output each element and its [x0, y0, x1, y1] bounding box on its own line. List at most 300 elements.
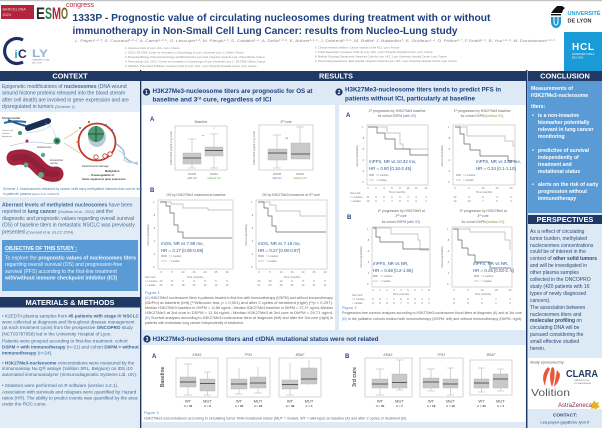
survival curve: PFS DSPM 3rd cure: 6	[400, 297, 402, 301]
survival curve: PFS D0PM 3rd cure: .8	[447, 238, 450, 242]
survival curve: PFS DSPM baseline: < median	[350, 199, 361, 203]
survival curve: PFS D0PM 3rd cure: 1	[447, 227, 449, 231]
survival curve: OS 3rd cure: 15	[291, 270, 294, 274]
survival curve: PFS DSPM 3rd cure: .8	[367, 238, 370, 242]
survival curve: PFS DSPM baseline: .4	[362, 158, 365, 162]
panel: results background	[141, 81, 526, 428]
survival curve: OS baseline: 1	[153, 200, 155, 204]
survival curve: PFS DSPM 3rd cure: 3	[393, 288, 395, 292]
survival curve: PFS DSPM baseline: 12	[415, 186, 418, 190]
text: context intro: Epigenetic modifications of nucleosomes (DNA wound	[2, 84, 127, 90]
affiliations right	[315, 46, 457, 63]
survival curve: OS 3rd cure: OS by H3K27Me3 measured at 3	[262, 193, 311, 197]
survival curve: PFS DSPM 3rd cure: 4	[421, 297, 423, 301]
survival curve: OS baseline: 9	[182, 279, 184, 283]
survival curve: PFS DSPM 3rd cure: mPFS, NR vs NR,	[373, 261, 408, 266]
survival curve: PFS D0PM baseline: 10	[482, 186, 485, 190]
boxplot: KRAS baseline: n = 9	[204, 404, 211, 408]
scheme: nucleosome release figure: Epigenetic	[2, 135, 13, 138]
panel: context	[0, 71, 149, 291]
survival curve: OS baseline: 25	[215, 270, 218, 274]
survival curve: PFS D0PM baseline: 7	[482, 199, 484, 203]
survival curve: PFS DSPM baseline: 9	[375, 199, 377, 203]
affiliations left: 5. Statistics, Pole Santé Publique, Hospices Civils of Lyon, HCL, Lyon University Hospital Center, Lyon, France	[125, 64, 257, 68]
text: perspectives: small effective studied	[530, 339, 579, 345]
boxplot: KRAS baseline	[176, 353, 218, 408]
text: conclusion: titers:	[531, 104, 545, 110]
logo: ESMO congress: congress	[66, 0, 94, 9]
caption: figure 1: H3K27Me3 at 3rd cure in DSPM = 11,54 ng/mL; Median H3K27Me3 at 3rd cure in DbPM = 29,71 ng/mL	[145, 311, 333, 315]
text: conclusion: monitoring	[538, 134, 565, 140]
survival curve: PFS D0PM baseline: < median	[463, 178, 474, 182]
survival curve: OS baseline: OS by H3K27Me3 measured at baseline	[166, 193, 226, 197]
text: context intro: after cell death) are involved in gene expression and are	[2, 97, 129, 103]
logo: Université de Lyon: UNIVERSITÉ	[568, 9, 601, 17]
survival curve: PFS DSPM baseline: >= median	[350, 195, 363, 199]
survival curve: PFS D0PM 3rd cure: 9	[453, 297, 455, 301]
survival curve: PFS D0PM baseline: .2	[448, 169, 451, 173]
survival curve: PFS D0PM baseline: 12	[454, 199, 457, 203]
boxplot: TP53 baseline: n = 20	[235, 404, 244, 408]
text: conclusion	[528, 81, 602, 213]
survival curve: OS 3rd cure: .6	[251, 226, 254, 230]
caption: figure 1: patients with metastatic lung cancer independently of treatment.	[145, 321, 244, 325]
text: context intro: dysregulated in tumors (Scheme 1).	[2, 104, 76, 110]
survival curve: PFS D0PM baseline: 1	[454, 109, 455, 113]
panel: sponsors: Study sponsored by:	[530, 360, 565, 364]
label A: A	[152, 354, 157, 360]
boxplot: BRAF 3rd cure	[470, 353, 512, 408]
survival curve: OS baseline: 30	[226, 270, 229, 274]
boxplot: baseline: DSPM	[188, 172, 197, 176]
survival curve: OS baseline: 22	[160, 279, 163, 283]
boxplot: BRAF baseline: WT	[287, 398, 294, 404]
text: perspectives: types of newly diagnosed	[530, 291, 586, 297]
boxplot: BRAF 3rd cure: WT	[478, 398, 485, 404]
survival curve: OS baseline: mOS, NR vs 7.98 mo,	[161, 241, 204, 246]
survival curve: PFS DSPM baseline: 4	[383, 186, 385, 190]
survival curve: PFS D0PM baseline: 20	[510, 186, 513, 190]
caption: figure 2: Progression-free survival analyses according to H3K27Me3-nucleosome blood titers at diagnosis (A) and at 3rd cure	[342, 311, 522, 315]
heading: result 2: 2	[338, 90, 341, 96]
text: conclusion: independently of	[538, 155, 579, 161]
survival curve: OS 3rd cure: 0	[258, 270, 260, 274]
survival curve: PFS DSPM baseline: for cohort DSPM (with ICI)	[378, 114, 416, 118]
survival curve: PFS DSPM 3rd cure: 4	[428, 301, 430, 305]
survival curve: PFS DSPM 3rd cure: 7	[386, 297, 388, 301]
boxplot: baseline: H3K27Me3 (ng/mL) log scale	[169, 131, 173, 165]
logo: Volition: Volition	[531, 388, 570, 399]
text: conclusion: •	[532, 182, 534, 188]
text: conclusion: relevant in lung cancer	[538, 127, 594, 133]
text: methods: (NCT03787058) led in the University Hospital of Lyon.	[2, 332, 112, 336]
survival curve: OS baseline: 5	[215, 279, 217, 283]
boxplot: baseline: **	[202, 134, 205, 138]
boxplot: TP53 3rd cure: TP53	[437, 353, 445, 357]
scheme: nucleosome release figure: tumor-suppressor gene expression	[82, 177, 126, 181]
survival curve: PFS D0PM baseline: .8	[448, 136, 451, 140]
scheme: nucleosome release figure: Nucleosome	[37, 145, 52, 149]
text: conclusion: progression without	[538, 189, 587, 195]
caption: figure 1: (A) H3K27Me3 nucleosome titers in patients treated in first-line with immunotherapy (DSPM) and without immunotherapy	[145, 296, 333, 300]
scheme: nucleosome release figure: Chromosome	[2, 116, 20, 120]
survival curve: OS 3rd cure: 9	[291, 279, 293, 283]
survival curve: OS baseline: 12	[215, 283, 218, 287]
heading: results: RESULTS	[319, 72, 353, 81]
survival curve: OS 3rd cure: 19	[269, 279, 272, 283]
text: aberrant levels: (OS) of baseline titers in metastatic NSCLC was previously	[2, 223, 135, 229]
logo: Université de Lyon	[551, 6, 601, 28]
heading: context: CONTEXT	[52, 72, 88, 81]
survival curve: PFS DSPM baseline: 4	[415, 195, 417, 199]
survival curve: PFS D0PM baseline: .4	[448, 158, 451, 162]
survival curve: PFS D0PM 3rd cure: for cohort D0PM (without ICI)	[462, 220, 504, 224]
caption: figure 1: Figure 1	[145, 290, 160, 295]
logo: CICLY: C	[18, 47, 27, 61]
survival curve: OS 3rd cure: Survival probability	[244, 223, 248, 246]
survival curve: OS baseline: 14	[204, 283, 207, 287]
boxplot: baseline: without ICI	[207, 176, 221, 180]
survival curve: PFS D0PM 3rd cure: 5	[481, 301, 483, 305]
survival curve: PFS D0PM 3rd cure: >= median	[481, 274, 494, 278]
title	[72, 12, 491, 37]
boxplot: KRAS baseline: n = 34	[184, 404, 193, 408]
scheme: nucleosome release figure: Genetic	[2, 132, 10, 135]
survival curve: PFS D0PM 3rd cure	[440, 209, 514, 305]
panel: conclusion	[528, 71, 602, 213]
survival curve: PFS D0PM baseline: st	[455, 109, 458, 112]
callout: objective of this study: To explore the prognostic values of nucleosomes titers	[5, 256, 136, 262]
survival curve: PFS DSPM baseline: < median	[376, 178, 387, 182]
survival curve: OS baseline: 0	[160, 270, 162, 274]
affiliations right: 9. Pneumology department, East hospital, Hospices Civils de Lyon, HCL, Lyon University Hospital Center, Lyon, France	[315, 59, 457, 63]
boxplot: TP53 3rd cure: n = 16	[427, 404, 436, 408]
logo: Clara: CLARA	[566, 369, 598, 380]
survival curve: PFS DSPM baseline: .2	[362, 169, 365, 173]
boxplot: baseline	[169, 120, 227, 180]
affiliations right: 8. Medical Oncology Department, Hospices Civils de Lyon, HCL, Lyon University Hospital Center, Lyon, France	[315, 54, 447, 58]
survival curve: PFS DSPM 3rd cure: < median	[380, 279, 391, 283]
logo: Clara	[566, 369, 598, 385]
survival curve: OS baseline: Num.sub	[145, 275, 156, 279]
heading: result 3: 3	[146, 337, 149, 343]
survival curve: PFS DSPM 3rd cure: 3	[428, 297, 430, 301]
panel: contact: Lea.payen-gay@chu-lyon.fr	[540, 420, 590, 424]
survival curve: PFS D0PM 3rd cure: 0	[447, 282, 449, 286]
boxplot: TP53 baseline: WT	[236, 398, 243, 404]
survival curve: PFS DSPM baseline	[350, 109, 428, 203]
survival curve: PFS DSPM baseline: >= median	[376, 173, 389, 177]
affiliations left: 3. Molecular Biology, Pharmacotoxicology and Biochemistry Lyon Sud, Hospices Civils de Lyon, Pierre Bénite, France	[125, 55, 265, 59]
survival curve: PFS D0PM 3rd cure: 7	[481, 297, 483, 301]
scheme: nucleosome release figure: Extracellular	[50, 159, 63, 162]
text: methods: (at each treatment cycle) from the prospective ONCOPRO study	[2, 325, 133, 330]
survival curve: OS baseline: 8	[204, 279, 206, 283]
survival curve: OS 3rd cure: 11	[324, 283, 327, 287]
survival curve: PFS DSPM baseline: 7	[383, 199, 385, 203]
boxplot: BRAF baseline	[279, 353, 321, 408]
callout: objective of this study: regarding overall survival (OS) and progression-free	[5, 262, 122, 268]
text: methods: under the ROC curve.	[2, 402, 47, 406]
survival curve: PFS DSPM 3rd cure: >= median	[352, 297, 365, 301]
survival curve: OS baseline: .6	[153, 226, 156, 230]
survival curve: OS baseline: 16	[193, 283, 196, 287]
survival curve: PFS D0PM 3rd cure: .4	[447, 260, 450, 264]
survival curve: PFS DSPM baseline: 4	[407, 195, 409, 199]
heading: result 1: 1	[145, 90, 148, 96]
survival curve: PFS DSPM baseline: 7	[391, 199, 393, 203]
survival curve: PFS DSPM 3rd cure: rd	[397, 214, 400, 217]
affiliations left: 1. Hospices Civils of Lyon, HCL, Lyon, France	[125, 46, 180, 50]
survival curve: OS 3rd cure: HR = 0.27 [0.08-0.87]	[258, 248, 300, 253]
panel: sponsors	[528, 358, 602, 411]
survival curve: PFS D0PM baseline: 2	[510, 195, 512, 199]
logo: Université de Lyon: DE LYON	[568, 18, 592, 24]
survival curve: PFS D0PM 3rd cure: progression by H3K27Me3 at	[463, 209, 507, 213]
survival curve: OS baseline: >= median	[169, 254, 182, 258]
logo: CICLY: DE LYON	[32, 62, 42, 64]
survival curve: PFS DSPM baseline: 1	[362, 125, 364, 129]
survival curve: OS 3rd cure: 25	[313, 270, 316, 274]
heading: result 1: H3K27Me3-nucleosome titers are prognostic for OS at	[152, 88, 313, 95]
survival curve: OS baseline: .4	[153, 239, 156, 243]
caption: figure 1: Median H3K27Me3 baseline in DSPM = 11,86 ng/mL; Median H3K27Me3 baseline in DbPM = 27,37 ng/mL;Median	[145, 306, 333, 310]
text: conclusion: mutational status	[538, 169, 580, 175]
survival curve: PFS DSPM 3rd cure: .4	[367, 260, 370, 264]
title: 1333P - Prognostic value of circulating nucleosomes during treatment with or without	[72, 12, 491, 24]
survival curve: PFS D0PM 3rd cure: 3	[477, 214, 479, 218]
survival curve: PFS D0PM 3rd cure: 12	[481, 288, 484, 292]
survival curve: OS baseline: 10	[226, 283, 229, 287]
text: perspectives: circulating DNA will be	[530, 325, 580, 331]
survival curve: PFS DSPM 3rd cure: 9	[372, 301, 374, 305]
survival curve: OS baseline: Time (months)	[187, 275, 203, 279]
heading: result 2	[335, 86, 501, 102]
panel: materials and methods	[0, 297, 140, 406]
label B: B	[347, 215, 352, 221]
panel: perspectives	[528, 215, 602, 352]
boxplot: TP53 baseline: n = 23	[254, 404, 263, 408]
survival curve: PFS DSPM 3rd cure	[352, 209, 430, 305]
boxplot: KRAS 3rd cure: KRAS	[384, 353, 393, 357]
survival curve: OS 3rd cure: 24	[269, 283, 272, 287]
survival curve: PFS DSPM baseline: 6	[391, 195, 393, 199]
boxplot: TP53 baseline	[227, 353, 270, 408]
panel: result 3	[142, 335, 526, 422]
survival curve: OS 3rd cure: 5	[269, 270, 271, 274]
text: methods: ratios (HR). The ability to predict events was quantified by the area	[2, 396, 138, 400]
survival curve: PFS DSPM baseline: HR = 0.80 [0.18-2.45]	[369, 166, 411, 171]
caption: figure 3: Figure 3	[144, 410, 159, 415]
boxplot: KRAS baseline: WT	[185, 398, 192, 404]
logo: AstraZeneca: AstraZeneca	[558, 402, 592, 409]
survival curve: PFS DSPM 3rd cure: 1	[367, 227, 369, 231]
survival curve: PFS D0PM baseline: 3	[496, 195, 498, 199]
survival curve: PFS D0PM baseline: .6	[448, 147, 451, 151]
logo: ESMO congress: BARCELONA	[2, 8, 26, 12]
logo: CICLY: CANCÉROLOGIE	[32, 58, 50, 62]
logo: HCL: HCL	[572, 42, 594, 53]
text: perspectives: tumor burden, methylated	[530, 236, 587, 242]
rotated label: 3rd cure: 3rd cure	[352, 367, 358, 387]
survival curve: PFS D0PM baseline: 10	[468, 199, 471, 203]
survival curve: PFS D0PM baseline: Time (months)	[476, 190, 492, 194]
survival curve: OS baseline: .2	[153, 252, 156, 256]
survival curve: OS baseline: 23	[160, 283, 163, 287]
survival curve: OS baseline: 21	[171, 283, 174, 287]
survival curve: OS baseline	[145, 193, 233, 287]
caption: figure 1: (B) Survival analyses according to H3K27Me3-nucleosome titers at diagnosis (left) and after the 3rd cure (right) in	[145, 316, 333, 320]
survival curve: PFS DSPM baseline: 2	[425, 199, 427, 203]
survival curve: PFS D0PM baseline: mPFS, NR vs 3.02 mo,	[476, 159, 521, 164]
survival curve: OS 3rd cure	[244, 193, 327, 287]
survival curve: PFS DSPM baseline: 10	[367, 199, 370, 203]
boxplot: BRAF baseline: MUT	[305, 398, 314, 404]
boxplot: BRAF 3rd cure: BRAF	[487, 353, 496, 357]
survival curve: PFS DSPM 3rd cure: 9	[379, 301, 381, 305]
caption: figure 3	[144, 410, 407, 420]
logo: ESMO congress: O	[61, 4, 68, 23]
text: perspectives: As a reflect of circulating	[530, 229, 585, 235]
survival curve: PFS D0PM 3rd cure: 0	[453, 288, 455, 292]
survival curve: PFS DSPM baseline: 8	[383, 195, 385, 199]
survival curve: OS 3rd cure: cure	[313, 193, 320, 197]
heading: result 2: H3K27Me3-nucleosome titers tends to predict PFS in	[345, 86, 501, 94]
survival curve: OS 3rd cure: .8	[251, 213, 254, 217]
text: methods: • H3K27Me3-nucleosome concentrations were measured by the	[2, 360, 135, 366]
boxplot: KRAS baseline: KRAS	[193, 353, 202, 357]
text: context intro	[2, 84, 129, 110]
boxplot: BRAF 3rd cure: n = 4	[497, 404, 504, 408]
survival curve: PFS DSPM 3rd cure: .6	[367, 249, 370, 253]
survival curve: PFS DSPM baseline: 6	[399, 199, 401, 203]
heading: conclusion	[528, 71, 602, 81]
survival curve: PFS D0PM baseline: 2	[510, 199, 512, 203]
survival curve: PFS DSPM 3rd cure: 8	[393, 301, 395, 305]
survival curve: OS 3rd cure: 25	[258, 279, 261, 283]
text: perspectives: context of other solid tumors	[530, 256, 597, 262]
survival curve: PFS DSPM 3rd cure: 7	[393, 297, 395, 301]
boxplot: 3rd cure: 3	[280, 120, 282, 124]
boxplot: 3rd cure: DSPM	[273, 172, 282, 176]
callout: objective of this study: with/without immune checkpoint inhibitor (ICI)	[4, 276, 117, 282]
logo: HCL: HOSPICES CIVILS	[572, 52, 595, 56]
survival curve: PFS DSPM 3rd cure: 8	[428, 288, 430, 292]
survival curve: PFS DSPM 3rd cure: HR = 0.68 [0.2-1.95]	[373, 268, 413, 273]
survival curve: PFS D0PM 3rd cure: .6	[447, 249, 450, 253]
survival curve: PFS D0PM baseline: 1	[448, 125, 450, 129]
survival curve: OS 3rd cure: 20	[302, 270, 305, 274]
survival curve: PFS D0PM baseline: Survival probability	[440, 144, 444, 167]
text: methods: Association with survivals and relapses were quantified by Hazard	[2, 390, 137, 394]
survival curve: OS 3rd cure: mOS, NR vs 7.18 mo,	[258, 241, 301, 246]
boxplot: 3rd cure: with ICI	[272, 176, 282, 180]
survival curve: OS 3rd cure: .2	[251, 252, 254, 256]
survival curve: PFS D0PM 3rd cure: HR = 0.26 [0.03-2. 5]	[473, 268, 514, 273]
boxplot: 3rd cure: cure	[284, 120, 292, 124]
text: aberrant levels	[2, 202, 135, 235]
survival curve: OS 3rd cure: >= median	[266, 254, 279, 258]
caption: figure 1	[145, 290, 333, 325]
survival curve: OS baseline: < median	[169, 259, 180, 263]
caption: figure 2: Figure 2	[342, 305, 357, 310]
boxplot: TP53 baseline: MUT	[254, 398, 263, 404]
survival curve: PFS DSPM baseline: 0	[367, 186, 369, 190]
heading: result 1: baseline and 3	[152, 96, 197, 104]
callout: objective of this study: OBJECTIVE OF THIS STUDY :	[5, 246, 77, 252]
boxplot: KRAS 3rd cure: WT	[377, 398, 384, 404]
survival curve: OS 3rd cure: 27	[258, 283, 261, 287]
text: conclusion: Measurements of	[531, 86, 573, 92]
survival curve: PFS D0PM baseline: 5	[468, 186, 470, 190]
survival curve: PFS D0PM 3rd cure: 1	[459, 209, 461, 213]
text: conclusion: immunotherapy	[538, 196, 576, 202]
survival curve: PFS DSPM baseline: Num.sub	[350, 191, 361, 195]
survival curve: OS baseline: 15	[193, 270, 196, 274]
caption: figure 2	[342, 305, 522, 321]
label A: A	[346, 113, 351, 119]
text: conclusion: •	[532, 113, 534, 119]
survival curve: OS baseline: >= median	[145, 279, 158, 283]
text: methods: automated immunoanalyzer (Immunodiagnostic Systems Ltd, UK).	[2, 372, 137, 377]
boxplot: TP53 3rd cure: WT	[428, 398, 435, 404]
survival curve: PFS DSPM 3rd cure: >= median	[380, 274, 393, 278]
boxplot: KRAS 3rd cure: MUT	[395, 398, 404, 404]
survival curve: PFS DSPM 3rd cure: 1	[377, 209, 379, 213]
boxplot: BRAF 3rd cure: MUT	[496, 398, 505, 404]
label B: B	[150, 188, 155, 194]
boxplot: KRAS 3rd cure	[365, 353, 412, 408]
survival curve: PFS D0PM baseline: >= median	[463, 173, 476, 177]
survival curve: PFS D0PM 3rd cure: rd	[479, 214, 482, 217]
callout: objective of this study	[2, 240, 138, 291]
boxplot: 3rd cure: D0PM	[296, 172, 305, 176]
heading: context	[0, 71, 140, 81]
survival curve: PFS DSPM 3rd cure: 6	[414, 288, 416, 292]
logo: HCL	[564, 32, 602, 71]
survival curve: PFS DSPM baseline: 2	[375, 186, 377, 190]
survival curve: PFS D0PM 3rd cure: < median	[481, 279, 492, 283]
boxplot: BRAF baseline: n = 4	[306, 404, 313, 408]
text: methods: Patients were grouped according to first-line treatment: cohort	[2, 338, 128, 344]
survival curve: PFS DSPM baseline: 3	[425, 195, 427, 199]
survival curve: PFS DSPM 3rd cure: Time (months)	[393, 292, 409, 296]
title: immunotherapy in Non-Small Cell Lung Cancer: results from Nucleo-Lung study	[72, 25, 458, 37]
label A: A	[150, 117, 155, 123]
logo: ESMO congress: E	[36, 4, 45, 23]
scheme: nucleosome release figure: Scheme 1: Nucleosomes released by cancer cells carry methylated histones that can be detected	[3, 187, 149, 191]
text: perspectives: and will be investigated in	[530, 263, 587, 269]
survival curve: PFS DSPM baseline: 6	[391, 186, 393, 190]
survival curve: PFS DSPM 3rd cure: 3	[395, 214, 397, 218]
survival curve: PFS DSPM 3rd cure: 8	[379, 297, 381, 301]
survival curve: PFS DSPM 3rd cure: 1	[379, 288, 381, 292]
caption: figure 1: (DbPm) at baseline (left) (**Wilcoxon test, p < 0,001) and after 2 cycles of treatment (right) (**p < 0,297).	[145, 301, 333, 305]
survival curve: PFS DSPM 3rd cure: < median	[352, 301, 363, 305]
affiliations left	[125, 46, 266, 68]
survival curve: PFS D0PM 3rd cure: 18	[495, 288, 498, 292]
survival curve: PFS D0PM 3rd cure: 7	[495, 297, 497, 301]
survival curve: PFS D0PM 3rd cure: 2	[495, 301, 497, 305]
survival curve: OS baseline: 10	[182, 270, 185, 274]
survival curve: OS baseline: 9	[193, 279, 195, 283]
survival curve: PFS DSPM baseline: st	[370, 109, 373, 112]
survival curve: OS 3rd cure: rd	[311, 193, 313, 196]
survival curve: PFS D0PM baseline: 6	[482, 195, 484, 199]
text: perspectives: herein.	[530, 346, 545, 352]
boxplot: KRAS 3rd cure: n = 30	[376, 404, 385, 408]
caption: figure 3: H3K27Me3 concentrations according to circulating tumor DNA mutational status (MUT = mutant, WT = wild-type) at baseline (A) and after 2 cycles of treatment (B).	[144, 416, 407, 420]
